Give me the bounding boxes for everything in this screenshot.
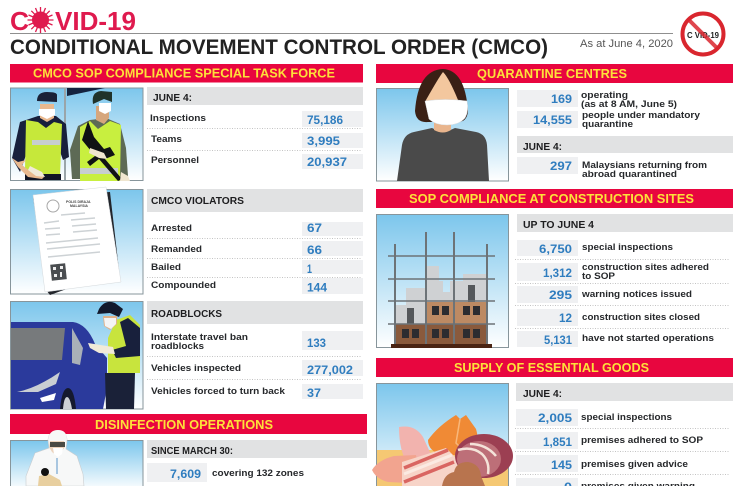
stat: centres operating (517, 90, 677, 110)
stat: people under quarantine: quarantine (582, 119, 633, 130)
stat: centres operating: 169 (551, 92, 572, 106)
heading: june 4 (516, 383, 733, 401)
stat: remanded (151, 241, 363, 257)
stat: premises adhered (516, 432, 704, 449)
heading: june 4 (147, 87, 363, 105)
stat: personnel (151, 154, 363, 169)
stat: remanded: 66 (307, 243, 322, 257)
stat: premises given advice: premises given advice (581, 459, 688, 470)
heading: june 4: JUNE 4: (523, 142, 562, 153)
heading: june 4: JUNE 4: (153, 93, 192, 104)
heading: roadblocks: ROADBLOCKS (151, 309, 222, 320)
banner: disinfection (10, 414, 367, 434)
illustration: police document: POLIS DIRAJA (66, 200, 91, 204)
panel: construction sites (376, 189, 733, 348)
stat: vehicles turned back (151, 384, 363, 400)
stat: sites adhered (517, 262, 709, 282)
stat: centres operating: (as at 8 AM, June 5) (581, 99, 677, 110)
stat: people under quarantine: people under mandatory (582, 110, 701, 121)
stat: personnel: Personnel (151, 155, 199, 166)
stat: covering zones: covering 132 zones (212, 468, 304, 479)
stat: sites adhered: construction sites adhered (582, 262, 709, 273)
stat: covering zones (147, 463, 304, 482)
heading: june 4: JUNE 4: (523, 389, 562, 400)
logo: COVID-19: VID-19 (55, 6, 136, 36)
heading: up to june 4: UP TO JUNE 4 (523, 220, 594, 231)
stat: warning notices: warning notices issued (581, 289, 692, 300)
stat: inspections: Inspections (150, 113, 206, 124)
stat: people under quarantine: 14,555 (533, 113, 572, 127)
banner: essential goods (376, 358, 733, 377)
stat: premises adhered: premises adhered to SOP (581, 435, 704, 446)
stat: vehicles turned back: 37 (307, 386, 321, 400)
stat: returning malaysians: abroad quarantined (582, 169, 677, 180)
illustration: worker in protective suit (10, 430, 143, 486)
stat: returning malaysians: 297 (550, 159, 572, 173)
stat: special inspections: 6,750 (539, 242, 572, 256)
panel: violators (10, 187, 363, 295)
stat: warning notices: 295 (549, 288, 572, 302)
date note: As at June 4, 2020 (580, 38, 673, 50)
panel: quarantine centres (376, 64, 733, 181)
panel: essential goods (372, 358, 733, 486)
heading: roadblocks (147, 301, 363, 324)
logo: COVID-19 (10, 6, 136, 36)
stat: sites closed (517, 309, 700, 326)
stat: returning malaysians (517, 157, 707, 180)
banner: construction sites (376, 189, 733, 208)
stat: inspections: 75,186 (307, 113, 343, 127)
stat: covering zones: 7,609 (170, 467, 201, 481)
stat: bailed (151, 260, 363, 276)
stat: inspections (150, 111, 363, 127)
stat: compounded: 144 (307, 280, 327, 294)
stat: vehicles inspected: Vehicles inspected (151, 363, 241, 374)
stat: sites adhered: to SOP (582, 271, 616, 282)
header rule (10, 33, 303, 34)
banner: disinfection: DISINFECTION OPERATIONS (95, 418, 273, 432)
stat: special inspections: special inspections (581, 412, 672, 423)
banner: quarantine centres: QUARANTINE CENTRES (477, 67, 627, 81)
stat: interstate roadblocks: 133 (307, 336, 326, 350)
stat: people under quarantine (517, 110, 701, 130)
stat: not started (517, 331, 714, 347)
stat: sites closed: 12 (559, 311, 572, 325)
stat: vehicles inspected (151, 360, 363, 377)
stat: returning malaysians: Malaysians returning from (582, 160, 707, 171)
stat: interstate roadblocks (151, 331, 363, 352)
stat: vehicles turned back: Vehicles forced to turn back (151, 386, 286, 397)
heading: june 4 (517, 136, 733, 153)
stat: teams: 3,995 (307, 134, 340, 148)
panel: roadblocks (10, 301, 363, 409)
stat: remanded: Remanded (151, 244, 202, 255)
banner: task force (10, 64, 363, 82)
stat: personnel: 20,937 (307, 155, 347, 169)
stat: interstate roadblocks: Interstate travel ban (151, 332, 248, 343)
stat: compounded (151, 278, 363, 294)
panel: disinfection (10, 414, 367, 486)
icon: no covid sign: C VID-19 (687, 31, 720, 40)
stat: premises adhered: 1,851 (543, 435, 572, 449)
stat: teams (151, 133, 363, 148)
banner: essential goods: SUPPLY OF ESSENTIAL GOODS (454, 361, 649, 375)
stat: warning notices (517, 286, 692, 303)
logo: COVID-19: C (10, 6, 29, 36)
illustration: woman wearing mask (376, 69, 508, 181)
icon: no covid sign (682, 14, 724, 54)
stat: premises given advice (516, 455, 688, 472)
illustration: building under construction (376, 214, 508, 348)
stat: arrested (151, 221, 363, 236)
stat: centres operating: operating (581, 90, 628, 101)
heading: since march 30: SINCE MARCH 30: (151, 446, 233, 457)
illustration: police and soldier (10, 88, 143, 181)
heading: cmco violators: CMCO VIOLATORS (151, 196, 244, 207)
hood overlap (48, 430, 67, 440)
heading: since march 30 (147, 440, 367, 458)
stat: premises given warning (516, 478, 695, 486)
heading: cmco violators (147, 189, 363, 212)
stat: vehicles inspected: 277,002 (307, 363, 353, 377)
illustration: police document (10, 187, 143, 295)
stat: compounded: Compounded (151, 280, 216, 291)
stat: special inspections: 2,005 (538, 411, 572, 425)
stat: not started: have not started operations (582, 333, 714, 344)
banner: quarantine centres (376, 64, 733, 83)
stat: special inspections (517, 240, 673, 256)
stat: special inspections (516, 409, 672, 426)
illustration: officer checking car (10, 302, 143, 409)
stat: premises given advice: 145 (551, 458, 572, 472)
banner: task force: CMCO SOP COMPLIANCE SPECIAL TASK FORCE (33, 66, 335, 80)
stat: arrested: 67 (307, 221, 322, 235)
stat: not started: 5,131 (544, 333, 572, 347)
banner: construction sites: SOP COMPLIANCE AT CONSTRUCTION SITES (409, 192, 694, 206)
stat: sites adhered: 1,312 (543, 266, 572, 280)
stat: sites closed: construction sites closed (582, 312, 700, 323)
title: CONDITIONAL MOVEMENT CONTROL ORDER (CMCO) (10, 36, 548, 59)
illustration: meat and fish (372, 384, 513, 486)
stat: arrested: Arrested (151, 223, 192, 234)
stat: interstate roadblocks: roadblocks (151, 341, 204, 352)
illustration: police document: MALAYSIA (70, 204, 88, 208)
heading: up to june 4 (517, 214, 733, 232)
panel: task force (10, 64, 363, 181)
stat: teams: Teams (151, 134, 182, 145)
stat: bailed: Bailed (151, 262, 181, 273)
stat: bailed: 1 (307, 262, 312, 276)
stat: special inspections: special inspections (582, 242, 673, 253)
